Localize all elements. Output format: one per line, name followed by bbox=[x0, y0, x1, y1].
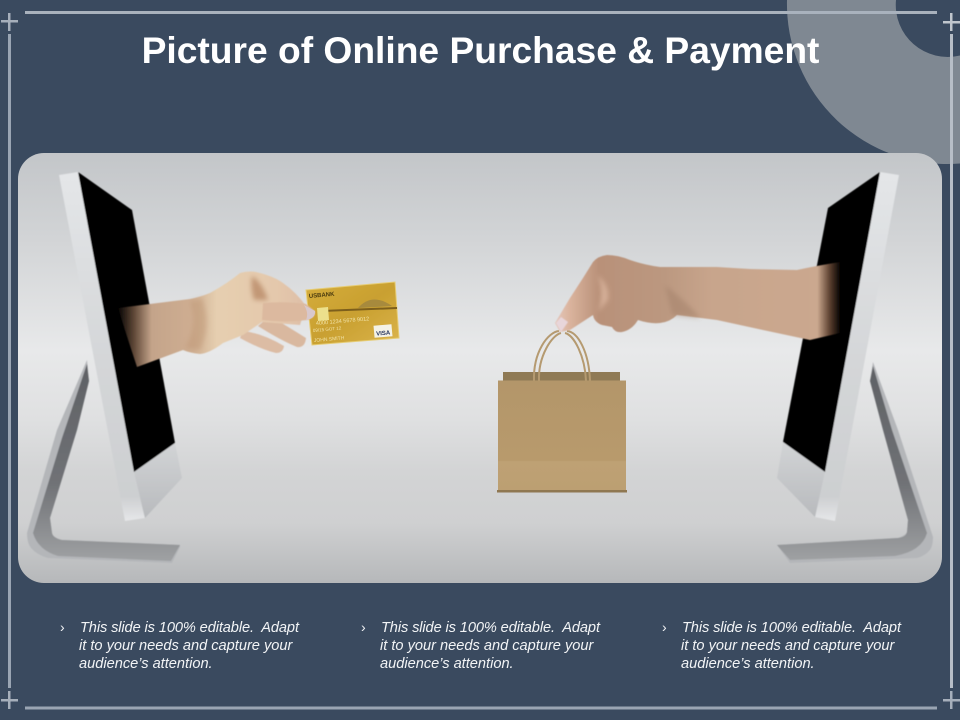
text block: column 3: This slide is 100% editable. Adapt bbox=[682, 620, 902, 636]
left knuckle shading bbox=[251, 276, 268, 300]
card stripe bbox=[322, 307, 397, 312]
card logo text: USBANK bbox=[309, 292, 335, 300]
text block: column 3: it to your needs and capture your bbox=[681, 638, 896, 654]
panel background bbox=[18, 153, 942, 583]
bag handles bbox=[534, 331, 590, 381]
left stand inner bbox=[33, 364, 180, 561]
text block: column 1: it to your needs and capture your bbox=[79, 638, 294, 654]
card expiry text: 09/15 GOT 12 bbox=[313, 325, 342, 333]
right monitor bbox=[777, 172, 933, 563]
right monitor chin bbox=[777, 442, 825, 517]
left monitor chin bbox=[134, 443, 182, 518]
right wrist shading bbox=[665, 285, 700, 318]
right stand rim bbox=[777, 362, 933, 563]
card chip bbox=[317, 307, 329, 321]
right hand holding bag bbox=[555, 255, 840, 340]
text block: column 2: › bbox=[361, 619, 366, 635]
right monitor body bbox=[815, 172, 899, 521]
text block: column 3: audience’s attention. bbox=[681, 656, 815, 672]
card tree artwork bbox=[358, 299, 392, 308]
bag front panel bbox=[498, 380, 626, 492]
right stand inner bbox=[777, 366, 927, 560]
card holder text: JOHN SMITH bbox=[314, 335, 345, 344]
left thumb nail bbox=[304, 305, 315, 320]
bag base edge bbox=[497, 490, 627, 492]
left arm and hand bbox=[118, 272, 306, 367]
left hand thumb bbox=[262, 302, 315, 322]
text block: column 1: This slide is 100% editable. Adapt bbox=[80, 620, 300, 636]
left hand holding card bbox=[118, 272, 399, 367]
credit card bbox=[306, 282, 399, 345]
left stand rim bbox=[27, 360, 180, 563]
shopping bag bbox=[497, 331, 627, 492]
title: Picture of Online Purchase & Payment bbox=[142, 29, 819, 71]
text block: column 3 bbox=[662, 619, 902, 672]
card number text: 4000 1234 5678 9012 bbox=[316, 316, 370, 327]
text block: column 2: This slide is 100% editable. Adapt bbox=[381, 620, 601, 636]
left monitor screen bbox=[78, 172, 175, 472]
left monitor body bbox=[59, 172, 145, 521]
photo panel bbox=[18, 153, 942, 583]
text block: column 2: audience’s attention. bbox=[380, 656, 514, 672]
right monitor screen bbox=[783, 172, 880, 472]
text block: column 1 bbox=[60, 619, 300, 672]
bag back panel bbox=[503, 372, 620, 381]
card network badge: VISA bbox=[376, 330, 391, 338]
text block: column 2 bbox=[361, 619, 601, 672]
left wrist shading bbox=[185, 298, 207, 350]
left monitor bbox=[27, 172, 182, 563]
decorative ring: top right bbox=[787, 0, 960, 164]
right fingernail bbox=[556, 317, 568, 332]
right hand crease shading bbox=[597, 275, 608, 312]
text block: column 2: it to your needs and capture your bbox=[380, 638, 595, 654]
text block: column 3: › bbox=[662, 619, 667, 635]
text block: column 1: › bbox=[60, 619, 65, 635]
text block: column 1: audience’s attention. bbox=[79, 656, 213, 672]
